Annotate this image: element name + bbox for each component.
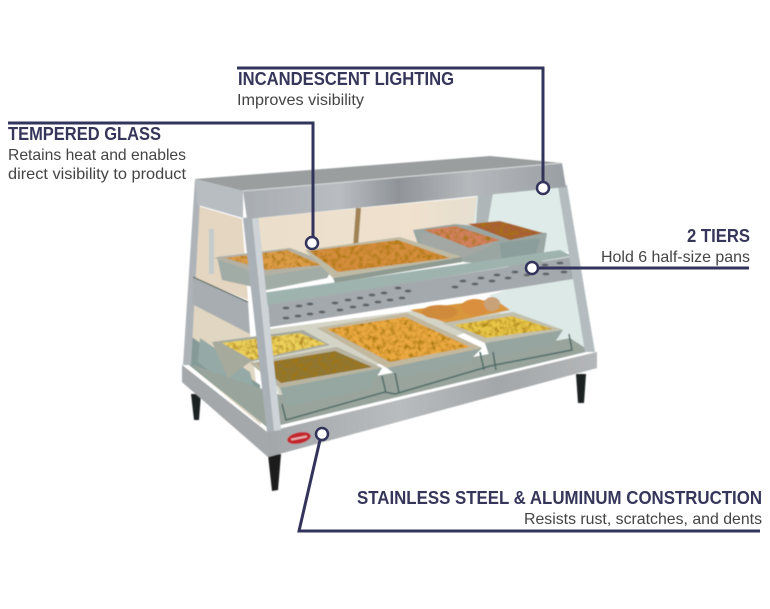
left rear post — [183, 179, 201, 365]
shelf front with perforations — [268, 257, 573, 327]
text: tempered glass description: direct visibility to product — [8, 166, 187, 183]
text: tempered glass description: Retains heat and enables — [8, 147, 186, 164]
pan rails — [282, 334, 572, 420]
product photo: heated display case — [182, 156, 597, 491]
rear legs — [191, 374, 586, 420]
text: hold 6 half-size pans: Hold 6 half-size pans — [601, 249, 750, 266]
lower food pans — [212, 297, 563, 407]
logo badge — [286, 430, 312, 446]
rear support post and tag — [209, 193, 493, 274]
callout: tempered glass — [8, 123, 318, 249]
shelf top edge — [262, 250, 572, 306]
canopy — [195, 156, 566, 219]
stainless base — [182, 338, 597, 457]
upper food pans — [214, 221, 547, 290]
callout: stainless steel and aluminum construction — [299, 428, 762, 531]
text: resists rust, scratches, and dents: Resists rust, scratches, and dents — [524, 511, 762, 528]
left side shelf panel — [192, 277, 250, 334]
cabinet interior upper and lower backdrops — [189, 187, 590, 425]
front posts — [243, 185, 595, 432]
callout: 2 tiers — [526, 226, 750, 274]
heading: 2 tiers: 2 TIERS — [687, 226, 750, 246]
heading: tempered glass: TEMPERED GLASS — [8, 124, 161, 144]
text: improves visibility: Improves visibility — [237, 92, 364, 109]
heading: incandescent lighting: INCANDESCENT LIGHTING — [238, 69, 454, 89]
callout: incandescent lighting — [237, 68, 549, 194]
front leg — [268, 454, 281, 491]
